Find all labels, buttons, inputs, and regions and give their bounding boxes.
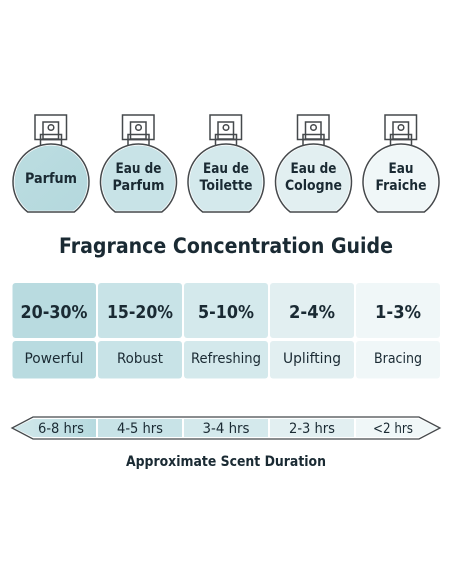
duration arrow: 6-8 hrs — [38, 421, 84, 437]
bottle: Eau de Parfum: Parfum — [112, 178, 164, 194]
bottle: Eau de Toilette: Toilette — [200, 178, 252, 194]
table column: Eau Fraiche concentration — [356, 283, 440, 378]
table column: Eau de Toilette concentration — [184, 283, 268, 378]
duration arrow: 2-3 hrs — [289, 421, 335, 437]
duration arrow: <2 hrs — [373, 421, 413, 437]
bottle: Eau de Parfum — [100, 115, 176, 212]
table column: Parfum concentration — [12, 283, 96, 378]
bottle: Eau de Toilette — [188, 115, 264, 212]
table column: Parfum concentration: Powerful — [24, 351, 84, 367]
bottle: Parfum: Parfum — [25, 171, 77, 187]
table column: Eau de Toilette concentration: Refreshing — [191, 351, 261, 367]
table column: Eau de Parfum concentration — [98, 283, 182, 378]
bottle: Eau de Cologne: Cologne — [285, 178, 342, 194]
bottle: Eau de Parfum: Eau de — [116, 161, 162, 177]
table column: Eau Fraiche concentration: Bracing — [374, 351, 422, 367]
bottle: Eau de Cologne: Eau de — [290, 161, 336, 177]
bottle: Eau Fraiche: Fraiche — [376, 178, 426, 194]
table column: Eau de Cologne concentration: Uplifting — [283, 351, 341, 367]
table column: Parfum concentration: 20-30% — [20, 302, 88, 323]
table column: Eau de Cologne concentration: 2-4% — [289, 302, 335, 323]
arrow caption: Approximate Scent Duration — [126, 454, 326, 470]
bottle: Eau Fraiche: Eau — [388, 161, 414, 177]
table column: Eau de Parfum concentration: 15-20% — [107, 302, 173, 323]
table column: Eau de Cologne concentration — [270, 283, 354, 378]
duration arrow: 4-5 hrs — [117, 421, 163, 437]
table column: Eau de Parfum concentration: Robust — [117, 351, 163, 367]
bottle: Eau Fraiche — [363, 115, 439, 212]
bottle: Eau de Toilette: Eau de — [203, 161, 249, 177]
table column: Eau Fraiche concentration: 1-3% — [375, 302, 421, 323]
bottle: Eau de Cologne — [276, 115, 352, 212]
duration arrow — [12, 417, 440, 439]
bottle: Parfum — [13, 115, 89, 212]
table column: Eau de Toilette concentration: 5-10% — [198, 302, 254, 323]
title: Fragrance Concentration Guide — [59, 234, 393, 258]
duration arrow: 3-4 hrs — [202, 421, 250, 437]
